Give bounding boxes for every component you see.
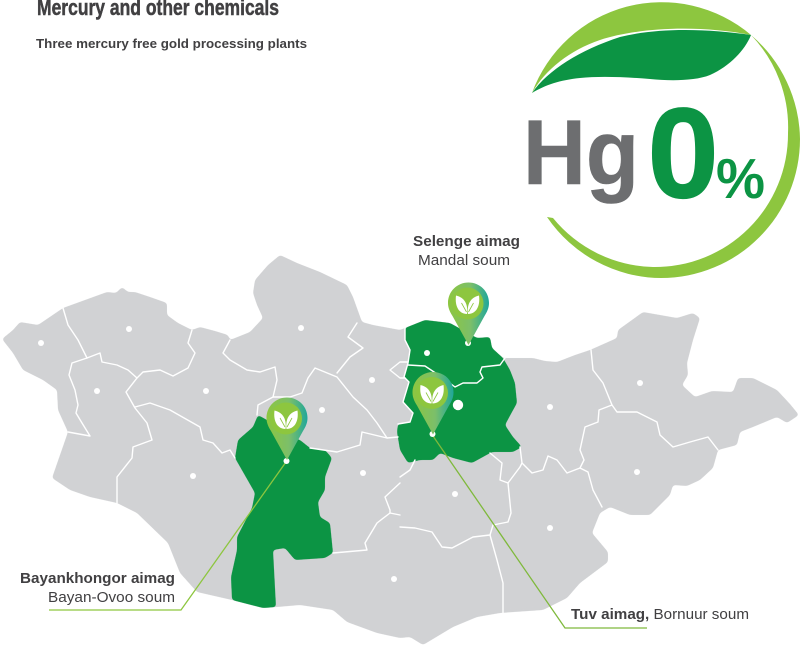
label: Selenge bbox=[413, 234, 520, 269]
country silhouette bbox=[2, 255, 799, 645]
pin: Tuv bbox=[412, 372, 454, 437]
Hg 0% badge bbox=[523, 2, 800, 278]
aimag centre dots bbox=[38, 325, 643, 582]
pin: Bayankhongor bbox=[266, 398, 308, 464]
Hg label: Hg bbox=[523, 102, 639, 204]
percent label: % bbox=[716, 147, 765, 211]
map of Mongolia bbox=[2, 255, 799, 645]
leader line: Tuv bbox=[433, 436, 647, 628]
label: Bayankhongor: Bayankhongor aimag bbox=[20, 571, 175, 587]
leaf: light green bbox=[532, 2, 751, 93]
label: Selenge: Selenge aimag bbox=[413, 234, 520, 250]
label: Bayankhongor bbox=[20, 571, 175, 606]
label: Selenge: Mandal soum bbox=[418, 253, 510, 269]
leader line: Bayankhongor bbox=[49, 462, 286, 610]
label: Tuv: Tuv aimag, Bornuur soum bbox=[571, 607, 749, 623]
subtitle: Three mercury free gold processing plants bbox=[36, 37, 307, 51]
leaf: dark green bbox=[532, 30, 751, 93]
0 label: 0 bbox=[648, 82, 719, 226]
ring crescent bbox=[547, 35, 800, 278]
pin: Selenge bbox=[448, 282, 489, 346]
region: Selenge and Tuv aimags bbox=[397, 320, 522, 463]
aimag borders bbox=[63, 308, 718, 613]
label: Bayankhongor: Bayan-Ovoo soum bbox=[48, 590, 175, 606]
region: Bayankhongor aimag bbox=[231, 415, 333, 608]
